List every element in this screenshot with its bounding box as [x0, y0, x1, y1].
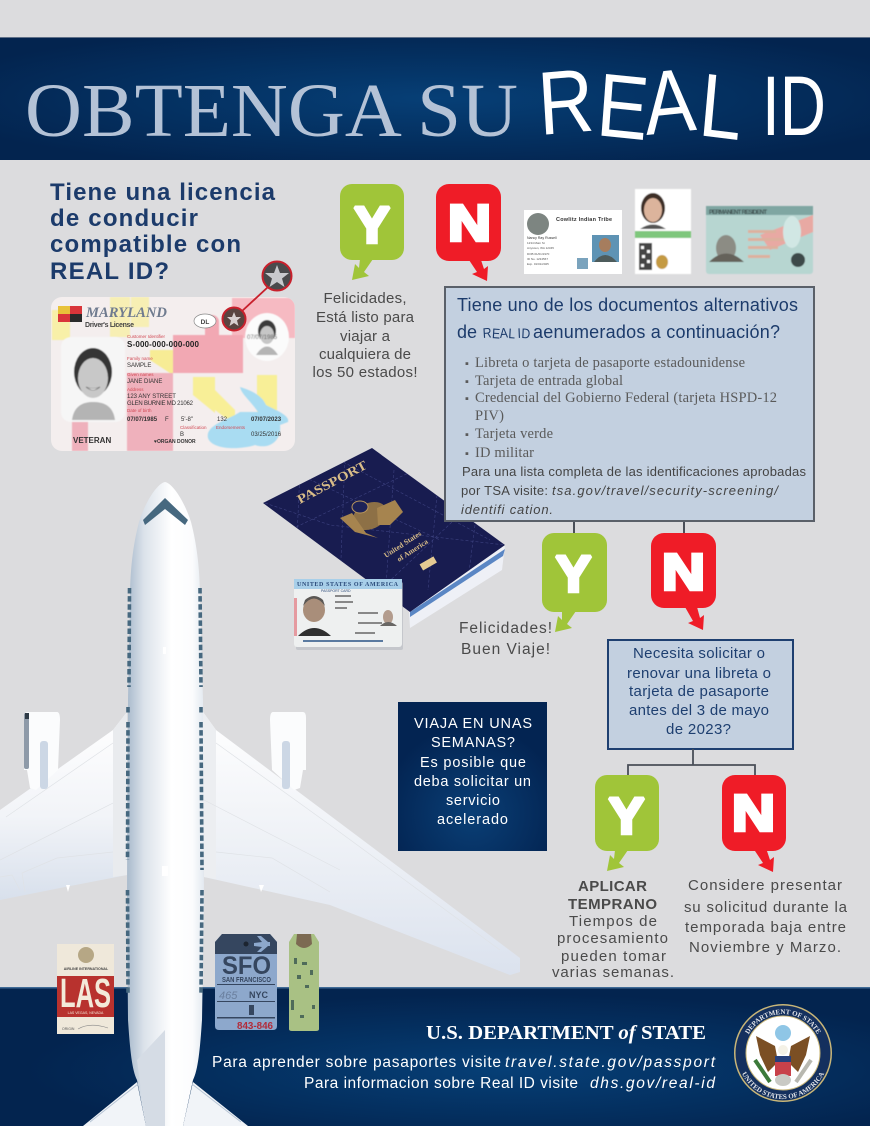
passport card: UNITED STATES OF AMERICA	[297, 582, 399, 588]
accepted documents list: ▪	[465, 393, 469, 405]
off-season text: Considere presentar	[688, 877, 842, 894]
department of state wordmark: U.S. DEPARTMENT of STATE	[426, 1022, 706, 1044]
luggage tag LAS: LAS	[60, 970, 111, 1016]
license flag pattern	[52, 297, 295, 451]
expedite callout: deba solicitar un	[414, 774, 531, 790]
box question: de	[457, 322, 477, 342]
Maryland license card	[51, 297, 295, 451]
luggage tag LAS: LAS VEGAS, NEVADA	[68, 1011, 104, 1015]
apply early text: TEMPRANO	[568, 896, 657, 913]
passport gold text: PASSPORT	[294, 457, 370, 507]
congratulations text	[459, 620, 552, 658]
yes outcome text	[312, 290, 418, 381]
license fields: Classification	[180, 425, 207, 430]
alternative documents box	[445, 287, 814, 521]
tail fin	[137, 1030, 165, 1126]
passport card: PASSPORT CARD	[321, 589, 351, 593]
passport renewal question box: de 2023?	[666, 721, 731, 738]
connector lines from documents box	[574, 520, 684, 534]
expedite callout: SEMANAS?	[431, 735, 515, 751]
passport	[263, 448, 505, 628]
DL badge	[194, 314, 216, 328]
TSA link note	[461, 464, 806, 517]
passport gold text: United States	[382, 529, 423, 560]
luggage tag LAS: ORIGIN	[62, 1027, 75, 1031]
expedite callout: Es posible que	[420, 755, 526, 771]
tribal ID card: Anytown, WA 12345	[527, 246, 554, 250]
luggage tag LAS: AIRLINE INTERNATIONAL	[64, 967, 109, 971]
luggage tag SFO	[215, 934, 277, 1032]
tribal ID card	[524, 210, 622, 274]
apply early text: Tiempos de	[569, 913, 657, 930]
passport gold text: of America	[395, 537, 430, 564]
license fields: 07/07/2023	[251, 417, 282, 423]
yes bubble 2	[542, 533, 607, 632]
accepted documents list: ID militar	[475, 445, 534, 461]
license fields: Date of birth	[127, 408, 152, 413]
license fields: F	[165, 417, 169, 423]
accepted documents list: Tarjeta de entrada global	[475, 373, 623, 389]
no bubble 3	[722, 775, 786, 872]
seal eagle	[755, 1025, 811, 1086]
tribal ID card: 1234 Main St	[527, 241, 545, 245]
expedite callout: VIAJA EN UNAS	[414, 716, 532, 732]
off-season text: Noviembre y Marzo.	[689, 939, 841, 956]
apply early text: APLICAR	[578, 878, 647, 895]
accepted documents list: ▪	[465, 429, 469, 441]
expedite callout: acelerado	[437, 812, 508, 828]
federal credential	[635, 189, 691, 274]
TSA link note: Para una lista completa de las identificaciones aprobadas	[462, 464, 806, 479]
luggage tag SFO: NYC	[249, 990, 269, 1000]
question heading: Tiene una licencia	[50, 179, 276, 206]
no bubble 3: N	[732, 784, 775, 842]
accepted documents list: Tarjeta verde	[475, 426, 553, 442]
license portrait	[63, 336, 118, 422]
tribal ID card: Exp. 01/01/2025	[527, 262, 549, 266]
license fields: B	[180, 432, 184, 438]
license fields: VETERAN	[73, 436, 111, 445]
accepted documents list: ▪	[465, 376, 469, 388]
fuselage	[127, 482, 204, 1126]
footer links: Para aprender sobre pasaportes visite	[212, 1054, 501, 1071]
accepted documents list: Credencial del Gobierno Federal (tarjeta HSPD-12	[475, 390, 777, 406]
accepted documents list: PIV)	[475, 408, 504, 424]
apply early text: varias semanas.	[552, 964, 674, 981]
luggage tag SFO: 465	[219, 990, 238, 1002]
license title: MARYLAND	[85, 305, 167, 321]
tribal ID card: DOB 01/01/1970	[527, 252, 550, 256]
accepted documents list: Libreta o tarjeta de pasaporte estadounidense	[475, 355, 745, 371]
title: ID	[762, 59, 826, 153]
question heading: de conducir	[50, 205, 198, 232]
title	[25, 51, 826, 159]
yes bubble 3	[595, 775, 659, 871]
green card: PERMANENT RESIDENT	[709, 210, 767, 216]
off-season text	[684, 877, 848, 956]
right wing	[203, 712, 520, 975]
apply early text: pueden tomar	[561, 948, 666, 965]
cockpit windows	[143, 498, 188, 525]
license fields: 5'-8"	[181, 417, 193, 423]
footer links	[212, 1054, 716, 1092]
connector lines from renewal box	[628, 749, 755, 776]
off-season text: su solicitud durante la	[684, 899, 848, 916]
box question	[457, 295, 798, 342]
TSA link note: identifi cation.	[461, 502, 553, 517]
yes bubble 1: Y	[354, 196, 390, 254]
yes bubble 3: Y	[608, 788, 644, 844]
tribal ID card: ID No. 1234567	[527, 257, 548, 261]
no bubble 1	[436, 184, 501, 281]
no bubble 1: N	[448, 194, 491, 252]
off-season text: temporada baja entre	[685, 919, 846, 936]
license title: Driver's License	[85, 322, 134, 329]
congratulations text: Felicidades!	[459, 620, 552, 637]
yes outcome text: Felicidades,	[324, 290, 406, 307]
accepted documents list: ▪	[465, 448, 469, 460]
luggage tag LAS	[57, 944, 114, 1034]
license fields: 07/07/1985	[127, 417, 158, 423]
footer links: Para informacion sobre Real ID visite	[304, 1075, 578, 1092]
footer band	[0, 987, 870, 1126]
box question: REAL ID	[482, 324, 531, 342]
question heading: compatible con	[50, 231, 241, 258]
department of state seal	[734, 1004, 832, 1102]
header banner	[0, 37, 870, 160]
license fields: JANE DIANE	[127, 379, 162, 385]
expedite callout	[398, 702, 547, 851]
apply early text	[552, 878, 674, 981]
passenger windows	[128, 588, 202, 993]
passport renewal question box: antes del 3 de mayo	[629, 702, 769, 719]
DL badge: DL	[201, 319, 209, 326]
right engine	[270, 712, 306, 790]
TSA link note: tsa.gov/travel/security-screening/	[552, 483, 779, 498]
ghost portrait	[245, 313, 289, 361]
seal ring text	[742, 1009, 824, 1100]
yes outcome text: cualquiera de	[319, 346, 411, 363]
seal ring text: UNITED STATES OF AMERICA	[742, 1071, 824, 1100]
license fields: SAMPLE	[127, 363, 151, 369]
tail stabilizers	[83, 1082, 248, 1126]
expedite callout: servicio	[446, 793, 500, 809]
luggage tag green	[289, 934, 319, 1031]
tribal ID card: Cowlitz Indian Tribe	[556, 217, 612, 223]
passport renewal question box	[608, 640, 793, 749]
license fields: 123 ANY STREET	[127, 394, 176, 400]
airplane illustration	[0, 482, 520, 1126]
yes outcome text: los 50 estados!	[312, 364, 418, 381]
REAL ID star callout	[222, 262, 292, 330]
license fields: 132	[217, 417, 228, 423]
license fields: S-000-000-000-000	[127, 340, 200, 349]
passport renewal question box: tarjeta de pasaporte	[629, 683, 769, 700]
passport gold text	[294, 457, 437, 570]
license fields	[73, 334, 282, 445]
license fields: Address	[127, 387, 144, 392]
license fields: Family name	[127, 356, 153, 361]
license fields: 03/25/2016	[251, 432, 282, 438]
passport card	[294, 579, 403, 650]
license title	[85, 308, 167, 327]
license fields: Endorsements	[216, 425, 246, 430]
passport renewal question box: renovar una libreta o	[627, 665, 771, 682]
accepted documents list	[465, 355, 777, 461]
yes bubble 1	[340, 184, 404, 280]
apply early text: procesamiento	[557, 930, 668, 947]
seal ring text: DEPARTMENT OF STATE	[744, 1009, 821, 1034]
no bubble 2: N	[662, 544, 705, 600]
left wing	[0, 712, 127, 900]
luggage tag SFO: SAN FRANCISCO	[222, 977, 271, 984]
title: OBTENGA SU	[25, 69, 518, 153]
box question: Tiene uno de los documentos alternativos	[457, 295, 798, 315]
license fields: GLEN BURNIE MD 21062	[127, 401, 194, 407]
congratulations text: Buen Viaje!	[461, 641, 550, 658]
no bubble 2	[651, 533, 716, 630]
question heading: REAL ID?	[50, 258, 169, 285]
box question: aenumerados a continuación?	[533, 322, 780, 342]
footer links: travel.state.gov/passport	[505, 1054, 716, 1071]
tribal ID card: Nancy Ray Russell	[527, 236, 557, 240]
ghost portrait: 07/07/1985	[247, 335, 278, 341]
green card	[706, 206, 813, 274]
luggage tag SFO: 843-846	[237, 1021, 273, 1032]
yes outcome text: viajar a	[340, 328, 391, 345]
title: REAL	[534, 51, 748, 159]
left engine	[24, 712, 60, 790]
Maryland flag crest	[58, 306, 82, 322]
accepted documents list: ▪	[465, 358, 469, 370]
yes outcome text: Está listo para	[316, 309, 415, 326]
yes bubble 2: Y	[556, 546, 592, 602]
license fields: Customer Identifier	[127, 334, 166, 339]
license fields: Given names	[127, 372, 154, 377]
license fields: ♥ORGAN DONOR	[154, 439, 196, 445]
question heading	[50, 179, 276, 285]
luggage tag SFO: SFO	[222, 952, 271, 980]
TSA link note: por TSA visite:	[461, 483, 548, 498]
footer links: dhs.gov/real-id	[590, 1075, 716, 1092]
passport renewal question box: Necesita solicitar o	[633, 645, 765, 662]
